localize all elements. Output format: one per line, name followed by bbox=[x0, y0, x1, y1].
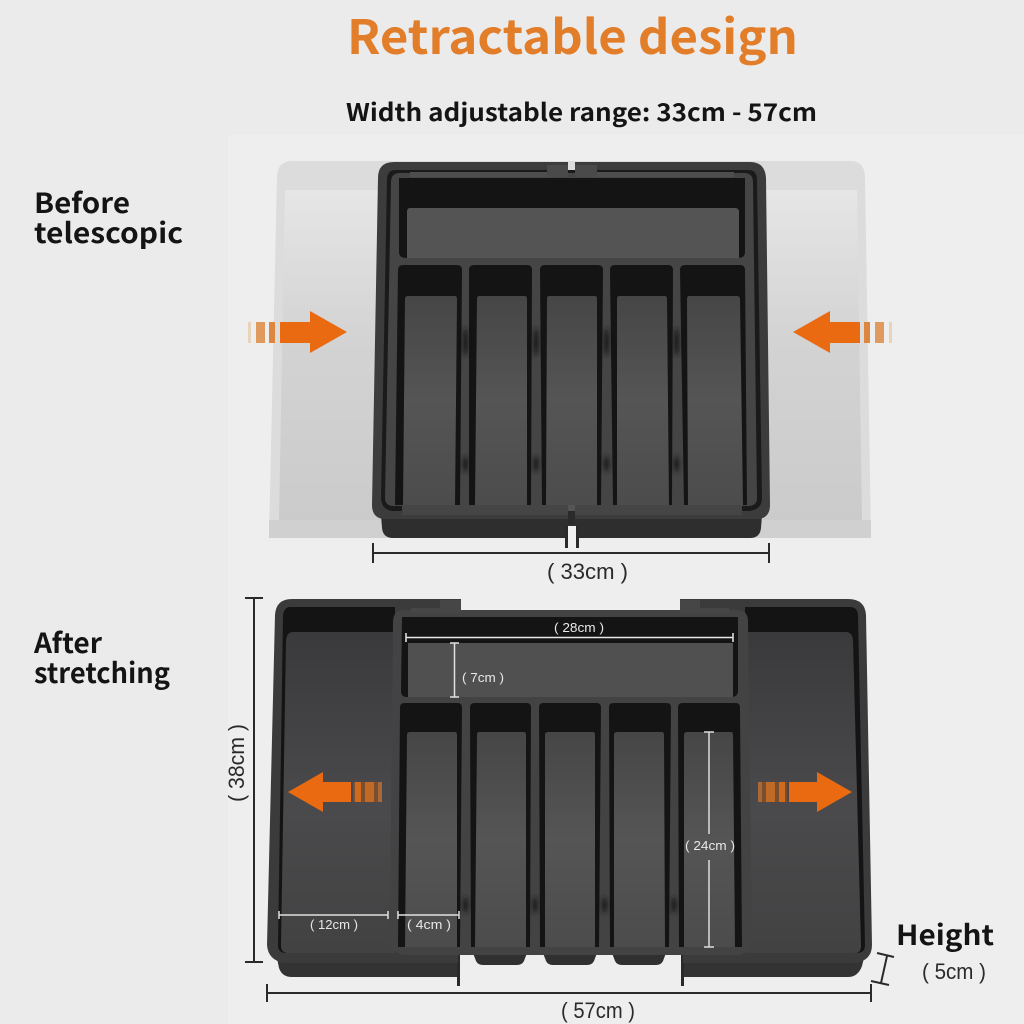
subtitle: Width adjustable range: 33cm - 57cm bbox=[346, 94, 817, 129]
ghost extended tray behind top organizer bbox=[269, 161, 871, 538]
dimension: height 5cm: ( 5cm ) bbox=[922, 959, 986, 984]
dimension: 4cm: ( 4cm ) bbox=[407, 917, 451, 932]
left drawer compartment bbox=[278, 607, 395, 953]
dimension: 28cm: ( 28cm ) bbox=[554, 620, 604, 635]
dimension: 12cm bbox=[279, 911, 388, 932]
arrow: right pointing, before bbox=[248, 311, 347, 353]
label: after stretching: stretching bbox=[34, 652, 170, 692]
dimension: 12cm: ( 12cm ) bbox=[310, 917, 358, 932]
slot 3 bbox=[540, 265, 603, 505]
separator legs bbox=[457, 955, 460, 986]
slot 4 bbox=[609, 703, 671, 947]
dimension: 57cm: ( 57cm ) bbox=[561, 998, 635, 1023]
top wide compartment bbox=[401, 617, 738, 697]
divider shadows bbox=[462, 328, 680, 472]
title: Retractable design bbox=[347, 0, 798, 68]
dimension: height 5cm bbox=[871, 914, 994, 985]
dimension: 4cm bbox=[398, 911, 459, 932]
central lighter backdrop bbox=[228, 135, 1024, 1024]
dimension: 28cm bbox=[406, 620, 733, 642]
slot 3 bbox=[539, 703, 601, 947]
center tabs top bbox=[410, 165, 734, 177]
top tabs bbox=[411, 600, 729, 613]
slot 5 bbox=[678, 703, 742, 947]
slot 1 bbox=[398, 703, 462, 947]
label: before telescopic: telescopic bbox=[34, 212, 183, 252]
dimension: 24cm bbox=[685, 732, 735, 947]
dimension: 38cm bbox=[224, 598, 263, 962]
dimension: 7cm: ( 7cm ) bbox=[462, 670, 504, 685]
dimension: 24cm: ( 24cm ) bbox=[685, 838, 735, 853]
dimension: 57cm bbox=[267, 984, 871, 1023]
dimension: height 5cm: Height bbox=[896, 914, 994, 954]
label: after stretching: After bbox=[33, 622, 103, 662]
outer shell bbox=[267, 599, 872, 963]
base skirts bbox=[277, 958, 458, 977]
feet bbox=[473, 953, 666, 965]
slot 1 bbox=[395, 265, 462, 505]
slot 2 bbox=[470, 703, 531, 947]
right drawer compartment bbox=[745, 607, 865, 953]
dimension: 33cm: ( 33cm ) bbox=[547, 559, 628, 584]
top organizer: retracted tray bbox=[372, 162, 770, 548]
bottom organizer: stretched tray bbox=[267, 599, 872, 986]
dimension: 33cm bbox=[373, 543, 769, 584]
label: before telescopic: Before bbox=[34, 182, 130, 222]
bottom lip bbox=[402, 505, 742, 515]
slot 5 bbox=[680, 265, 747, 505]
tray outer shell bbox=[372, 162, 770, 519]
inner sliding tray bbox=[390, 610, 752, 955]
tray base skirt bbox=[381, 515, 762, 538]
slot 4 bbox=[610, 265, 673, 505]
top wide compartment bbox=[399, 178, 745, 258]
arrow: left pointing, after bbox=[288, 772, 382, 812]
arrow: left pointing, before bbox=[793, 311, 892, 353]
arrow: right pointing, after bbox=[758, 772, 852, 812]
divider shadows bbox=[462, 897, 677, 913]
center notch bottom bbox=[565, 505, 579, 548]
dimension: 38cm: ( 38cm ) bbox=[224, 724, 249, 802]
dimension: 7cm bbox=[450, 643, 504, 697]
slot 2 bbox=[469, 265, 532, 505]
